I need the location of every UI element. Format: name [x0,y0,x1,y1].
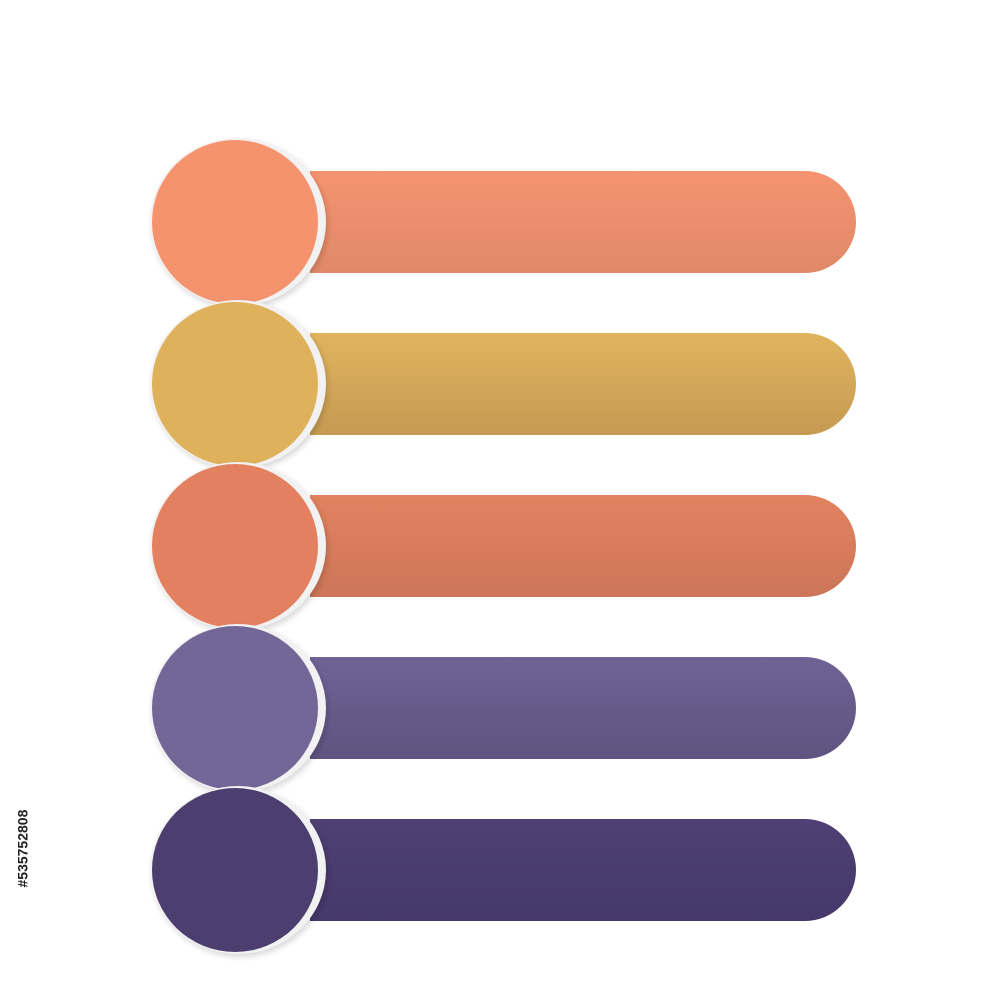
circle 5 [150,786,326,954]
row 3: terracotta [150,462,856,630]
circle 3 [150,462,326,630]
bar 4 [310,657,856,759]
stock id text: #535752808 [14,810,30,888]
circle 1 [150,138,326,306]
circle 4 [150,624,326,792]
bar 3 [310,495,856,597]
row 5: dark purple [150,786,856,959]
bar 5 [310,819,856,921]
row 2: gold [150,300,856,468]
circle 2 [150,300,326,468]
bar 1 [310,171,856,273]
row 4: purple [150,624,856,792]
row 1: orange [150,138,856,306]
bar 2 [310,333,856,435]
